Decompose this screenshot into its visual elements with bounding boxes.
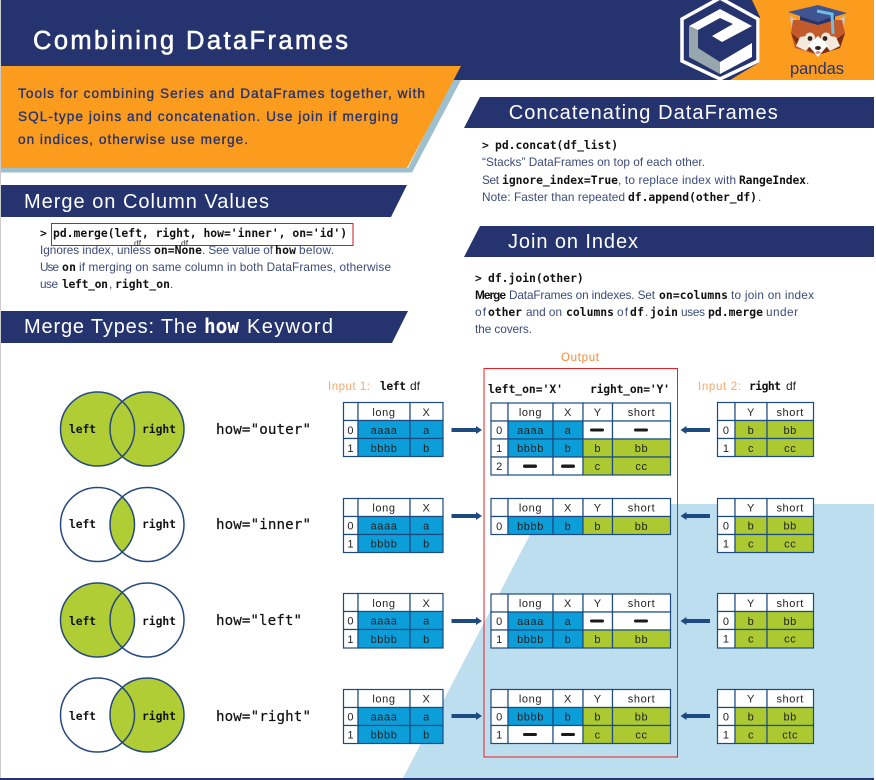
table: output, left: Y — [594, 598, 602, 610]
table: output, inner: bbbb — [517, 521, 544, 533]
text block: concat: . — [758, 190, 761, 204]
table: left df, inner: b — [423, 538, 430, 550]
table: left df, inner — [344, 498, 443, 552]
venn: inner: left — [69, 517, 96, 531]
code box: pd.merge(left, right, how='inner', on='id') — [53, 226, 347, 240]
table: right df, left — [718, 594, 814, 648]
table: right df, left: b — [748, 616, 754, 628]
text block: merge syntax: Ignores index, unless — [40, 243, 151, 257]
table: output, left: b — [594, 634, 601, 646]
text block: concat: df.append(other_df) — [628, 190, 757, 204]
venn: right: right — [142, 709, 176, 723]
table: left df, outer: 0 — [347, 425, 354, 437]
arrow — [680, 712, 710, 720]
label: Input 2: right — [749, 379, 781, 393]
table: right df, right: bb — [783, 712, 797, 724]
table: output, right — [491, 690, 670, 744]
table: output, left: aaaa — [517, 616, 544, 628]
venn: right — [60, 678, 184, 752]
table: output, outer: c — [595, 461, 601, 473]
table: right df, right — [718, 690, 814, 744]
title: Combining DataFrames — [33, 27, 348, 55]
table: right df, right: b — [748, 712, 754, 724]
table: left df, outer — [344, 402, 443, 456]
text block: merge syntax: left_on — [62, 277, 108, 291]
arrow — [680, 617, 710, 625]
panel: intro callout — [1, 66, 461, 172]
table: output, right: bbbb — [517, 712, 544, 724]
table: right df, left: c — [748, 634, 754, 646]
table: right df, outer: cc — [784, 443, 796, 455]
text block: merge syntax: , — [109, 277, 112, 291]
table: right df, outer: bb — [783, 425, 797, 437]
arrow — [452, 712, 482, 720]
table: left df, right: a — [423, 712, 430, 724]
label: Input 1: left — [380, 379, 406, 393]
table: right df, outer: b — [748, 425, 754, 437]
text block: join: Merge — [475, 288, 506, 302]
table: output, right: 0 — [496, 712, 503, 724]
heading: Join on Index — [464, 226, 874, 257]
text block: concat: Set — [482, 173, 500, 187]
table: output, right: b — [565, 712, 571, 724]
table: right df, inner: b — [748, 520, 754, 532]
label: Input 2 — [698, 379, 797, 393]
text block: join: on=columns — [659, 288, 728, 302]
text block: concat: Note: Faster than repeated — [482, 190, 625, 204]
table: output, left: X — [564, 598, 572, 610]
table: left df, right: 1 — [347, 730, 354, 742]
logo: hexagon cube e — [682, 0, 758, 79]
table: right df, left: short — [776, 598, 804, 610]
table: output, outer — [491, 403, 670, 475]
table: left df, left: X — [423, 598, 431, 610]
table: right df, left: 0 — [723, 616, 730, 628]
table: left df, left — [344, 594, 443, 648]
text block: join: the covers. — [475, 322, 532, 336]
keyword: right: how="right" — [216, 709, 311, 725]
intro text: SQL-type joins and concatenation. Use join if merging — [18, 109, 398, 124]
text block: concat: ignore_index=True — [502, 173, 618, 187]
text: pandas: pandas — [790, 60, 844, 78]
table: output, inner: 0 — [496, 521, 503, 533]
table: output, outer: Y — [594, 407, 602, 419]
text block: merge syntax: df — [134, 238, 142, 248]
text block: merge syntax: df — [181, 238, 189, 248]
table: right df, inner: bb — [783, 520, 797, 532]
table: right df, inner: Y — [747, 502, 755, 514]
table: output, left: short — [628, 598, 655, 610]
text block: merge syntax: > — [40, 226, 47, 240]
venn: outer — [60, 392, 184, 466]
label: Input 2: Input 2: — [698, 381, 741, 393]
table: right df, outer: Y — [747, 407, 755, 419]
table: output, right: cc — [635, 730, 648, 742]
table: right df, right: c — [748, 730, 754, 742]
table: left df, left: a — [423, 616, 430, 628]
venn: inner: right — [142, 517, 176, 531]
table: output, left: 1 — [496, 634, 503, 646]
venn: outer: right — [142, 422, 176, 436]
output frame — [484, 368, 678, 757]
text block: concat: pd.concat(df_list) — [495, 138, 618, 152]
venn: left: left — [69, 614, 96, 628]
keyword: left: how="left" — [216, 613, 302, 629]
table: output, inner: bb — [635, 521, 648, 533]
table: output, outer: a — [565, 425, 572, 437]
table: right df, right: 1 — [723, 730, 730, 742]
text block: concat — [482, 138, 809, 204]
arrow — [452, 512, 482, 520]
table: output, inner: Y — [594, 502, 602, 514]
label: Input 1: Input 1: — [328, 381, 370, 393]
table: output, outer: long — [519, 407, 542, 419]
label: Input 2: df — [786, 379, 797, 393]
background: light blue slanted panel — [403, 504, 874, 778]
table: output, right: c — [595, 730, 601, 742]
heading: Concatenating DataFrames — [464, 97, 874, 128]
table: left df, outer: 1 — [347, 443, 354, 455]
table: right df, left: Y — [747, 598, 755, 610]
table: output, outer: 1 — [496, 443, 503, 455]
venn: left — [60, 583, 184, 657]
table: left df, inner: 1 — [347, 538, 354, 550]
text block: merge syntax: below. — [299, 243, 334, 257]
table: right df, right: short — [776, 694, 804, 706]
venn: right: left — [69, 709, 96, 723]
table: left df, left: b — [423, 634, 430, 646]
table: right df, outer: 1 — [723, 443, 730, 455]
heading: Merge Types — [1, 311, 408, 343]
text block: concat: “Stacks” DataFrames on top of each other. — [482, 155, 705, 169]
table: right df, inner: 0 — [723, 520, 730, 532]
table: output, left: bb — [635, 634, 648, 646]
table: output, inner: b — [594, 521, 601, 533]
heading: Merge Types: Keyword — [247, 316, 333, 338]
table: left df, right: X — [423, 694, 431, 706]
text block: join: pd.merge — [708, 305, 763, 319]
text block: merge syntax: how — [275, 243, 296, 257]
label: merge keys: right_on='Y' — [590, 382, 670, 396]
table: output, inner — [491, 498, 670, 534]
arrow — [452, 426, 482, 434]
table: output, outer: bbbb — [517, 443, 544, 455]
text block: merge syntax: . See value of — [202, 243, 274, 257]
text block: join: of — [617, 305, 629, 319]
table: output, inner: b — [565, 521, 571, 533]
text block: merge syntax: on=None — [154, 243, 202, 257]
table: left df, inner: aaaa — [371, 520, 398, 532]
table: output, outer: 2 — [496, 461, 503, 473]
table: left df, inner: 0 — [347, 520, 354, 532]
icon: red panda with graduation cap — [788, 5, 847, 57]
text block: merge syntax — [40, 224, 391, 291]
table: output, left: b — [565, 634, 571, 646]
table: output, outer: 0 — [496, 425, 503, 437]
table: right df, inner — [718, 498, 814, 552]
table: output, outer: aaaa — [517, 425, 544, 437]
text block: concat: RangeIndex — [739, 173, 806, 187]
table: output, inner: long — [519, 502, 542, 514]
table: output, left: 0 — [496, 616, 503, 628]
label: Output: Output — [561, 352, 600, 364]
table: right df, left: cc — [784, 634, 796, 646]
text block: merge syntax: on — [62, 260, 76, 274]
table: output, right: short — [628, 694, 655, 706]
text block: join: . — [645, 305, 648, 319]
header band — [1, 0, 874, 80]
text block: join: df — [630, 305, 644, 319]
text block: join: join — [650, 305, 678, 319]
table: left df, right: long — [372, 694, 396, 706]
table: right df, inner: short — [776, 502, 804, 514]
text block: join: other — [488, 305, 522, 319]
table: left df, inner: a — [423, 520, 430, 532]
table: output, outer: cc — [635, 461, 648, 473]
table: output, right: Y — [594, 694, 602, 706]
table: right df, outer: 0 — [723, 425, 730, 437]
text block: join: > — [475, 271, 482, 285]
intro text: Tools for combining Series and DataFrames together, with — [18, 86, 425, 101]
table: output, outer: short — [628, 407, 655, 419]
table: output, outer: b — [565, 443, 571, 455]
table: right df, inner: 1 — [723, 538, 730, 550]
heading: Merge Types: Merge Types: The — [24, 316, 197, 338]
text block: concat: , to replace index with — [618, 173, 736, 187]
code box — [52, 224, 353, 246]
table: right df, inner: c — [748, 538, 754, 550]
table: left df, outer: a — [423, 425, 430, 437]
text block: join: df.join(other) — [488, 271, 584, 285]
table: left df, right: bbbb — [371, 730, 397, 742]
intro text: on indices, otherwise use merge. — [18, 132, 248, 147]
table: right df, outer: c — [748, 443, 754, 455]
logo: orange panel with pandas mascot — [730, 0, 874, 80]
table: output, inner: X — [564, 502, 572, 514]
table: output, right: long — [519, 694, 542, 706]
text block: join: of — [475, 305, 487, 319]
table: output, right: bb — [635, 712, 648, 724]
table: left df, right — [344, 690, 443, 744]
keyword: outer: how="outer" — [216, 422, 311, 438]
table: output, left — [491, 594, 670, 648]
table: left df, inner: bbbb — [371, 538, 397, 550]
table: left df, inner: long — [372, 502, 396, 514]
table: right df, left: bb — [783, 616, 797, 628]
table: left df, outer: X — [423, 407, 431, 419]
table: left df, right: aaaa — [371, 712, 398, 724]
arrow — [452, 617, 482, 625]
label: Input 1 — [328, 379, 421, 393]
text block: join: uses — [681, 305, 705, 319]
table: left df, outer: b — [423, 443, 430, 455]
table: right df, right: Y — [747, 694, 755, 706]
table: left df, outer: bbbb — [371, 443, 397, 455]
table: output, outer: b — [594, 443, 601, 455]
venn: left: right — [142, 614, 176, 628]
table: left df, outer: aaaa — [371, 425, 398, 437]
text block: merge syntax: right_on — [115, 277, 170, 291]
text block: concat: > — [482, 138, 489, 152]
table: right df, left: 1 — [723, 634, 730, 646]
arrow — [680, 426, 710, 434]
table: output, outer: bb — [635, 443, 648, 455]
table: left df, outer: long — [372, 407, 396, 419]
table: right df, outer: short — [776, 407, 804, 419]
table: left df, right: b — [423, 730, 430, 742]
text block: join: under — [766, 305, 798, 319]
table: output, left: a — [565, 616, 572, 628]
table: output, right: 1 — [496, 730, 503, 742]
table: left df, left: 0 — [347, 616, 354, 628]
label: Input 1: df — [410, 379, 421, 393]
heading: Concatenating DataFrames: Concatenating DataFrames — [509, 102, 778, 124]
text block: join: and on — [526, 305, 562, 319]
heading: Merge on Column Values — [1, 185, 407, 217]
text block: merge syntax: use — [40, 277, 58, 291]
table: output, right: b — [594, 712, 601, 724]
table: output, left: bbbb — [517, 634, 544, 646]
table: left df, left: bbbb — [371, 634, 397, 646]
label: merge keys: left_on='X' — [488, 382, 563, 396]
table: output, left: long — [519, 598, 542, 610]
table: output, outer: X — [564, 407, 572, 419]
text block: join: DataFrames on indexes. Set — [509, 288, 656, 302]
label: merge keys — [488, 382, 670, 396]
heading: Join on Index: Join on Index — [508, 231, 638, 253]
arrow — [680, 512, 710, 520]
keyword: inner: how="inner" — [216, 517, 311, 533]
table: right df, outer — [718, 402, 814, 456]
venn: outer: left — [69, 422, 96, 436]
text block: merge syntax: . — [170, 277, 173, 291]
heading: Merge Types: how — [204, 314, 240, 338]
table: left df, left: long — [372, 598, 396, 610]
table: output, right: X — [564, 694, 572, 706]
text block: join: to join on index — [731, 288, 814, 302]
table: left df, inner: X — [423, 502, 431, 514]
text block: join: columns — [566, 305, 614, 319]
heading: Merge on Column Values: Merge on Column Values — [24, 191, 269, 213]
table: left df, left: 1 — [347, 634, 354, 646]
table: output, inner: short — [628, 502, 655, 514]
text block: concat: . — [806, 173, 809, 187]
table: right df, right: ctc — [782, 730, 798, 742]
table: right df, inner: cc — [784, 538, 796, 550]
intro text — [18, 86, 425, 147]
table: left df, right: 0 — [347, 712, 354, 724]
table: right df, right: 0 — [723, 712, 730, 724]
venn: inner — [60, 488, 184, 562]
table: left df, left: aaaa — [371, 616, 398, 628]
text block: join — [475, 271, 814, 336]
text block: merge syntax: Use — [40, 260, 59, 274]
text block: merge syntax: if merging on same column in both DataFrames, otherwise — [79, 260, 391, 274]
